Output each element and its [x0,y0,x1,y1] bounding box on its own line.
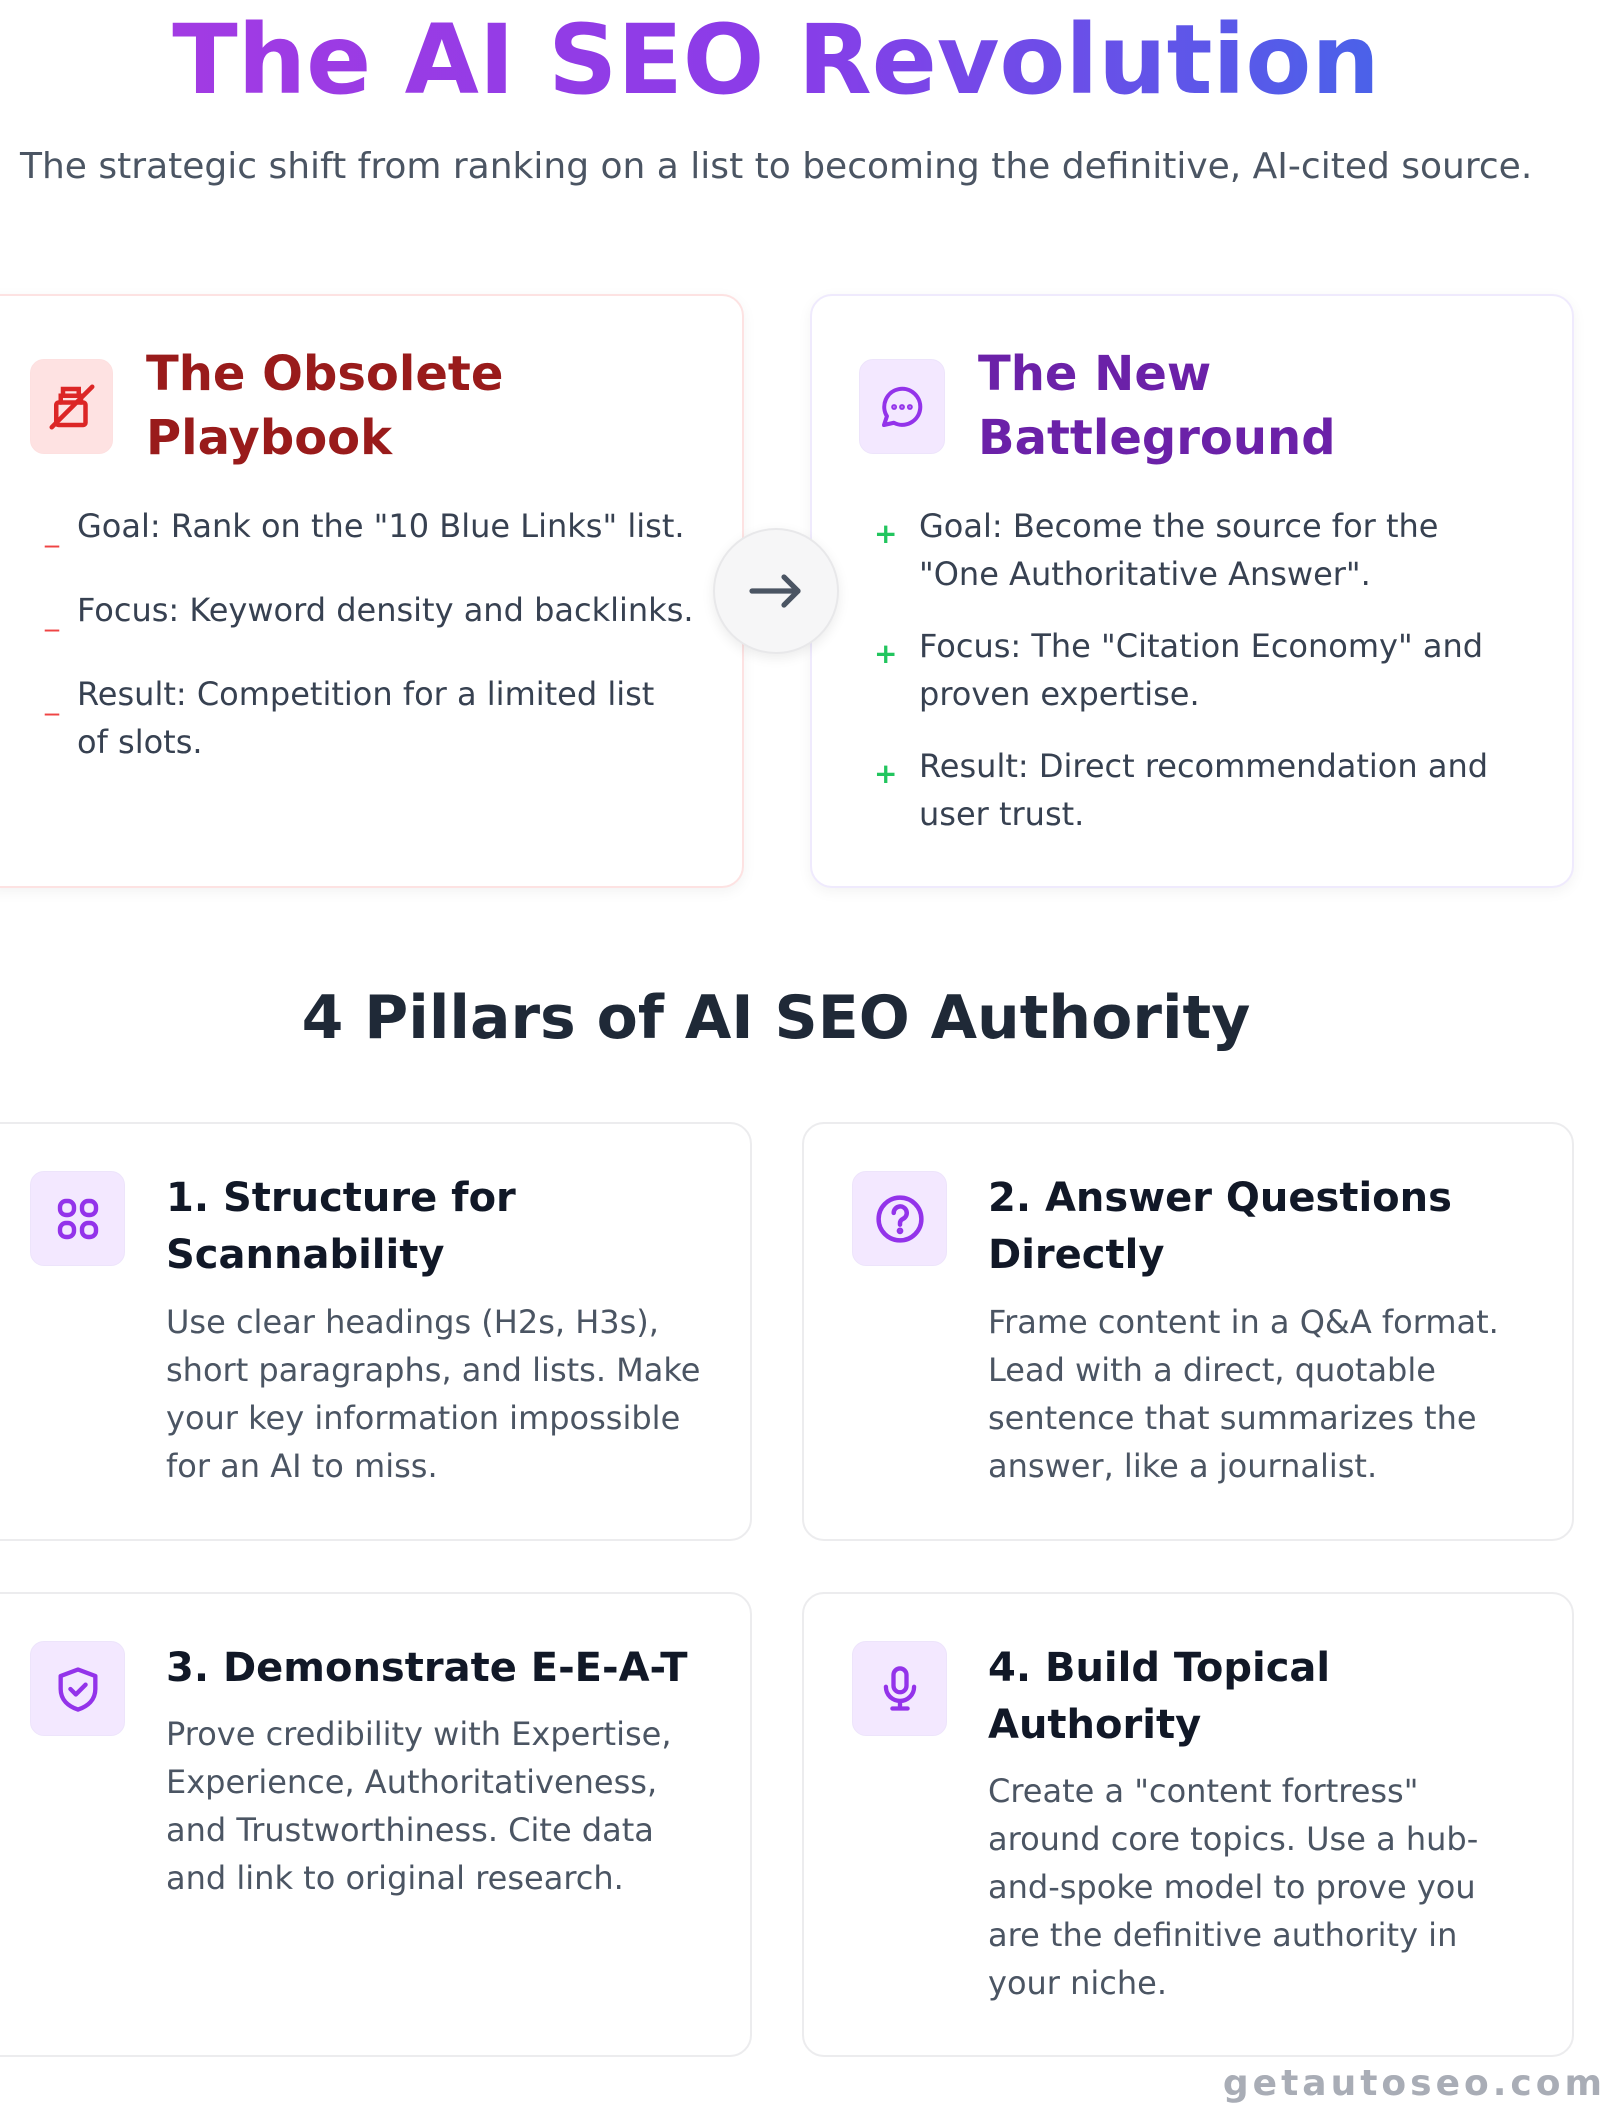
text: pillar 4: Create a "content fortress" [988,1772,1418,1810]
icon: chat [859,359,945,454]
text: pillar 3: and Trustworthiness. Cite data [166,1811,654,1849]
text: pillar 2: 2. Answer Questions [988,1175,1452,1221]
text: pillar 1: 1. Structure for [166,1175,516,1221]
list: new items: "One Authoritative Answer". [919,555,1371,593]
text: pillar 2: answer, like a journalist. [988,1447,1377,1485]
list: new items: Goal: Become the source for the [919,507,1438,545]
list: obsolete items: of slots. [77,723,203,761]
heading: obsolete: The Obsolete [146,346,503,402]
text: pillar 4: 4. Build Topical [988,1645,1330,1691]
text: pillar 4: your niche. [988,1964,1167,2002]
panel: pillar 3 [0,1592,752,2057]
text: pillar 4: and-spoke model to prove you [988,1868,1476,1906]
panel: pillar 2 [802,1122,1574,1541]
footer: brand: getautoseo.com [1223,2063,1606,2104]
text: pillar 3: 3. Demonstrate E-E-A-T [166,1645,688,1691]
list: obsolete items: Goal: Rank on the "10 Blue Links" list. [77,507,685,545]
text: pillar 2: Frame content in a Q&A format. [988,1303,1499,1341]
heading: new battleground: Battleground [978,410,1336,466]
subtitle: The strategic shift from ranking on a list to becoming the definitive, AI-cited source. [20,146,1532,187]
heading: new battleground [978,346,1336,466]
list: new items: + [874,757,897,790]
list: new items: + [874,637,897,670]
text: pillar 2: Lead with a direct, quotable [988,1351,1436,1389]
heading: obsolete [146,346,503,466]
panel: obsolete playbook [0,294,744,888]
arrow [713,528,839,654]
panel: new battleground [810,294,1574,888]
title: The AI SEO Revolution [172,4,1380,116]
panel: pillar 4 [802,1592,1574,2057]
icon: shield [30,1641,125,1736]
list: obsolete items: _ [45,515,59,548]
icon: grid [30,1171,125,1266]
text: pillar 4: are the definitive authority in [988,1916,1457,1954]
list: new items [874,507,1488,833]
text: pillar 1: your key information impossible [166,1399,680,1437]
heading: 4 pillars: 4 Pillars of AI SEO Authority [302,983,1250,1053]
text: pillar 2: sentence that summarizes the [988,1399,1477,1437]
list: obsolete items: Focus: Keyword density and backlinks. [77,591,694,629]
text: pillar 1: Use clear headings (H2s, H3s), [166,1303,659,1341]
list: new items: user trust. [919,795,1084,833]
text: pillar 4: around core topics. Use a hub- [988,1820,1478,1858]
panel: pillar 1 [0,1122,752,1541]
list: obsolete items [44,507,694,761]
list: new items: Result: Direct recommendation and [919,747,1488,785]
list: obsolete items: _ [45,599,59,632]
list: obsolete items: _ [45,683,59,716]
text: pillar 2: Directly [988,1232,1164,1278]
text: pillar 3 [166,1645,688,1897]
icon: question [852,1171,947,1266]
text: pillar 3: Prove credibility with Expertise, [166,1715,671,1753]
text: pillar 3: Experience, Authoritativeness, [166,1763,657,1801]
list: new items: + [874,517,897,550]
text: pillar 1: for an AI to miss. [166,1447,438,1485]
text: pillar 3: and link to original research. [166,1859,624,1897]
list: new items: proven expertise. [919,675,1200,713]
list: obsolete items: Result: Competition for a limited list [77,675,654,713]
text: pillar 4: Authority [988,1702,1201,1748]
text: pillar 1: Scannability [166,1232,444,1278]
text: pillar 1 [166,1175,700,1485]
heading: new battleground: The New [978,346,1211,402]
text: pillar 2 [988,1175,1499,1485]
icon: obsolete [30,359,113,454]
heading: obsolete: Playbook [146,410,392,466]
icon: microphone [852,1641,947,1736]
text: pillar 4 [988,1645,1478,2002]
text: pillar 1: short paragraphs, and lists. Make [166,1351,700,1389]
list: new items: Focus: The "Citation Economy" and [919,627,1483,665]
